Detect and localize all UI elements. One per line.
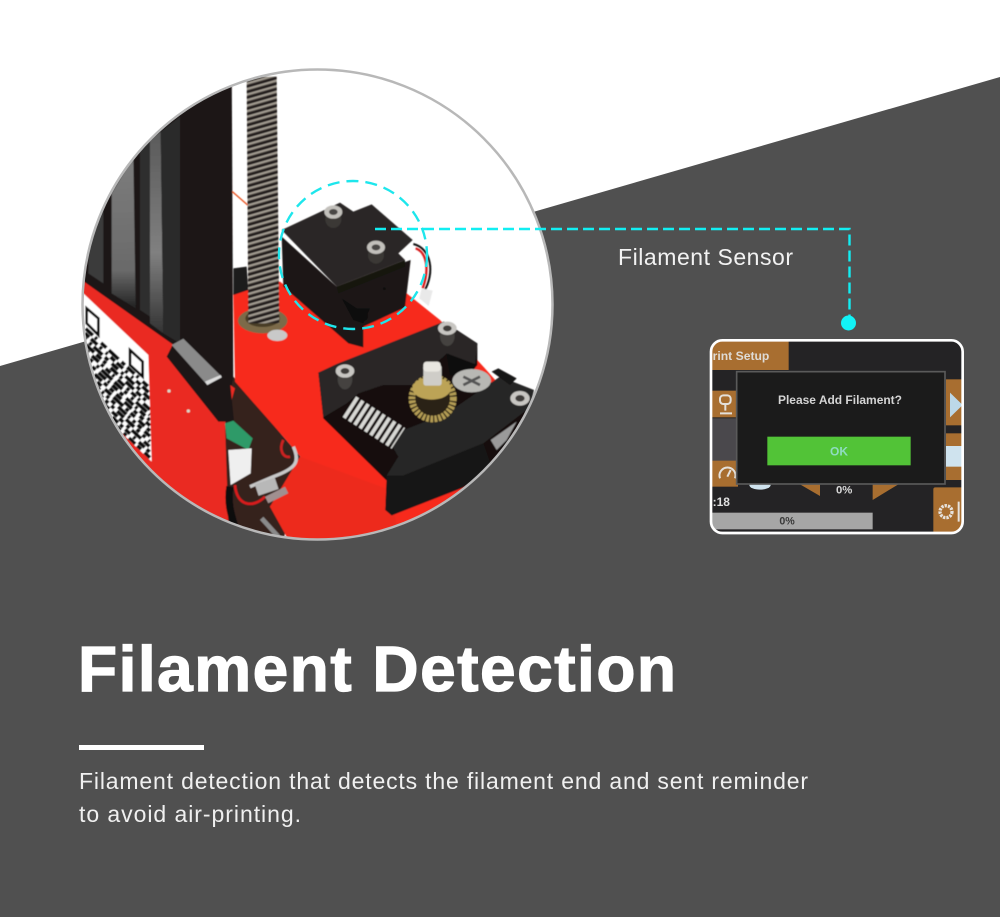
frame dots [167,389,190,413]
progress bar [711,513,873,529]
orange wire [232,192,248,206]
lead screw [247,77,279,323]
filament sensor block [282,203,413,347]
gear button [933,487,963,533]
progress bar: 0% [779,515,795,527]
touchscreen inset [710,340,963,533]
print setup tab: rint Setup [713,349,770,363]
description line 1: Filament detection that detects the filament end and sent reminder [79,768,808,794]
description line 2: to avoid air-printing. [79,801,301,827]
title: Filament Detection [78,633,676,705]
label: Filament Sensor: Filament Sensor [618,244,793,270]
red frame left face [70,280,235,522]
dialog: OK [830,445,848,459]
print setup tab [710,340,789,370]
orange arrows [800,484,898,500]
circular product photo [84,76,552,538]
dialog [737,372,945,484]
left icon buttons [712,391,738,487]
connector and wires [225,421,296,537]
QR code sticker [80,293,152,462]
screen background shading [712,418,736,461]
title underline [79,745,204,750]
red frame top plate [233,282,537,567]
sensor wire [413,244,433,306]
percent readout: 0% [836,484,852,496]
brass gear and shaft [409,362,457,422]
time readout: :18 [713,495,730,509]
dialog: Please Add Filament? [778,393,902,407]
circular highlight under dialog [749,484,771,490]
aluminium column [84,86,234,386]
pan head screw [452,369,491,392]
dark mount [233,267,248,295]
extruder housing [318,322,534,515]
connector end dot [841,316,856,330]
washer and bolt [238,308,287,341]
photo ring [82,70,552,540]
right controls [946,379,962,480]
rocker switch [167,339,234,422]
dashed connector line [375,229,850,318]
dashed highlight circle around sensor [279,181,427,329]
left icon glyphs [719,395,735,478]
dark interior [217,377,303,567]
spring [349,407,398,438]
housing screws [336,322,530,406]
description [79,768,808,827]
